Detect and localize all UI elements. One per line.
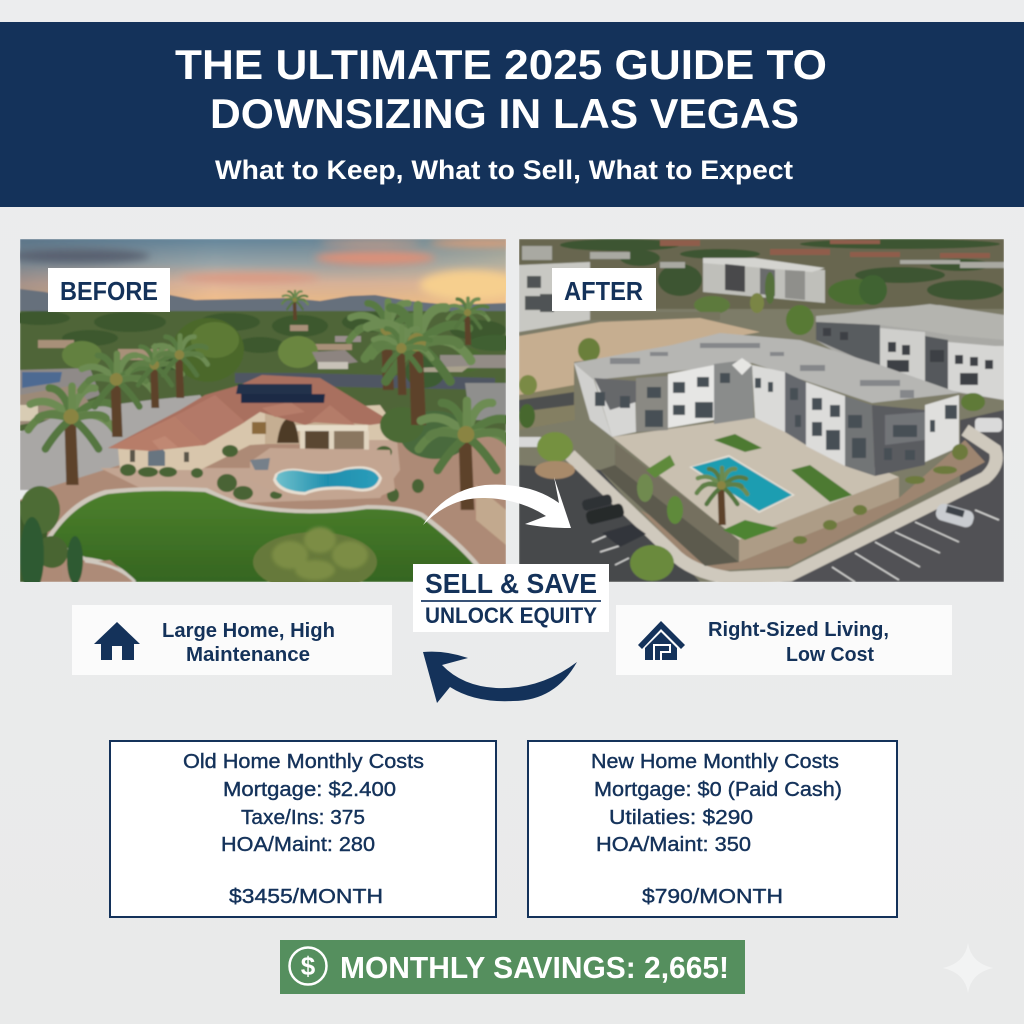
main building roof [574,333,959,403]
icon: solid house [94,622,140,660]
title [175,41,827,137]
panel: old home monthly costs: Mortgage: $2.400 [223,779,396,801]
house [118,405,392,470]
shrubs [120,445,424,502]
caption text: large home [162,620,335,666]
label: after: AFTER [564,276,643,306]
callout: sell and save: UNLOCK EQUITY [425,603,597,628]
icon: outlined house [638,621,685,660]
background suburb [519,239,1004,309]
lawn [47,487,481,582]
icon: dollar coin: $ [301,951,316,981]
rear right building [816,305,1004,400]
courtyard [612,417,899,540]
parking lots [519,465,700,582]
caption text: large home: Large Home, High [162,620,335,642]
title: DOWNSIZING IN LAS VEGAS [210,90,799,137]
panel: old home monthly costs: Old Home Monthly Costs [183,751,424,773]
arrow: white curved arrow to after photo [423,477,571,528]
panel: old home monthly costs [110,741,496,917]
foreground greenery [252,532,378,582]
ground [20,420,506,582]
sidewalk and landscape [640,440,985,572]
panel: new home monthly costs: Mortgage: $0 (Paid Cash) [594,779,842,801]
caption text: right-sized: Right-Sized Living, [708,619,889,641]
panel: new home monthly costs: New Home Monthly Costs [591,751,839,773]
callout: sell and save: SELL & SAVE [425,568,597,599]
arrow: navy curved arrow back to before [423,652,577,703]
rear building [703,262,825,303]
caption text: right-sized [708,619,889,666]
icon: sparkle watermark [943,943,993,993]
caption text: large home: Maintenance [186,644,310,666]
callout: sell and save [413,564,609,632]
panel: large home caption [72,605,392,675]
banner: monthly savings [280,940,745,994]
label: after [552,268,656,311]
panel: new home monthly costs: $790/MONTH [642,886,783,908]
panel: old home monthly costs: HOA/Maint: 280 [221,834,375,856]
panel: new home monthly costs [528,741,897,917]
left wing [574,363,612,437]
label: before [48,268,170,312]
header banner [0,22,1024,207]
title: THE ULTIMATE 2025 GUIDE TO [175,41,827,88]
panel: old home monthly costs: $3455/MONTH [229,886,383,908]
banner: monthly savings: MONTHLY SAVINGS: 2,665! [340,950,729,985]
panel: new home monthly costs: HOA/Maint: 350 [596,834,751,856]
panel: old home monthly costs: Taxe/Ins: 375 [241,807,365,829]
patio and pool [250,448,395,500]
right wing [752,365,785,432]
caption text: right-sized: Low Cost [786,644,874,666]
icon: dollar coin [290,948,326,984]
right side wall and palms [476,485,506,545]
trees and cars lower left [519,437,541,447]
photo: before, large house with lawn and pool [10,239,530,593]
panel: right-sized caption [616,605,952,675]
photo: after, townhome complex with pool [519,239,1004,582]
label: before: BEFORE [60,276,158,306]
panel: new home monthly costs: Utilaties: $290 [609,807,753,829]
dirt lot [519,318,760,395]
subtitle: What to Keep, What to Sell, What to Expect [215,155,793,185]
